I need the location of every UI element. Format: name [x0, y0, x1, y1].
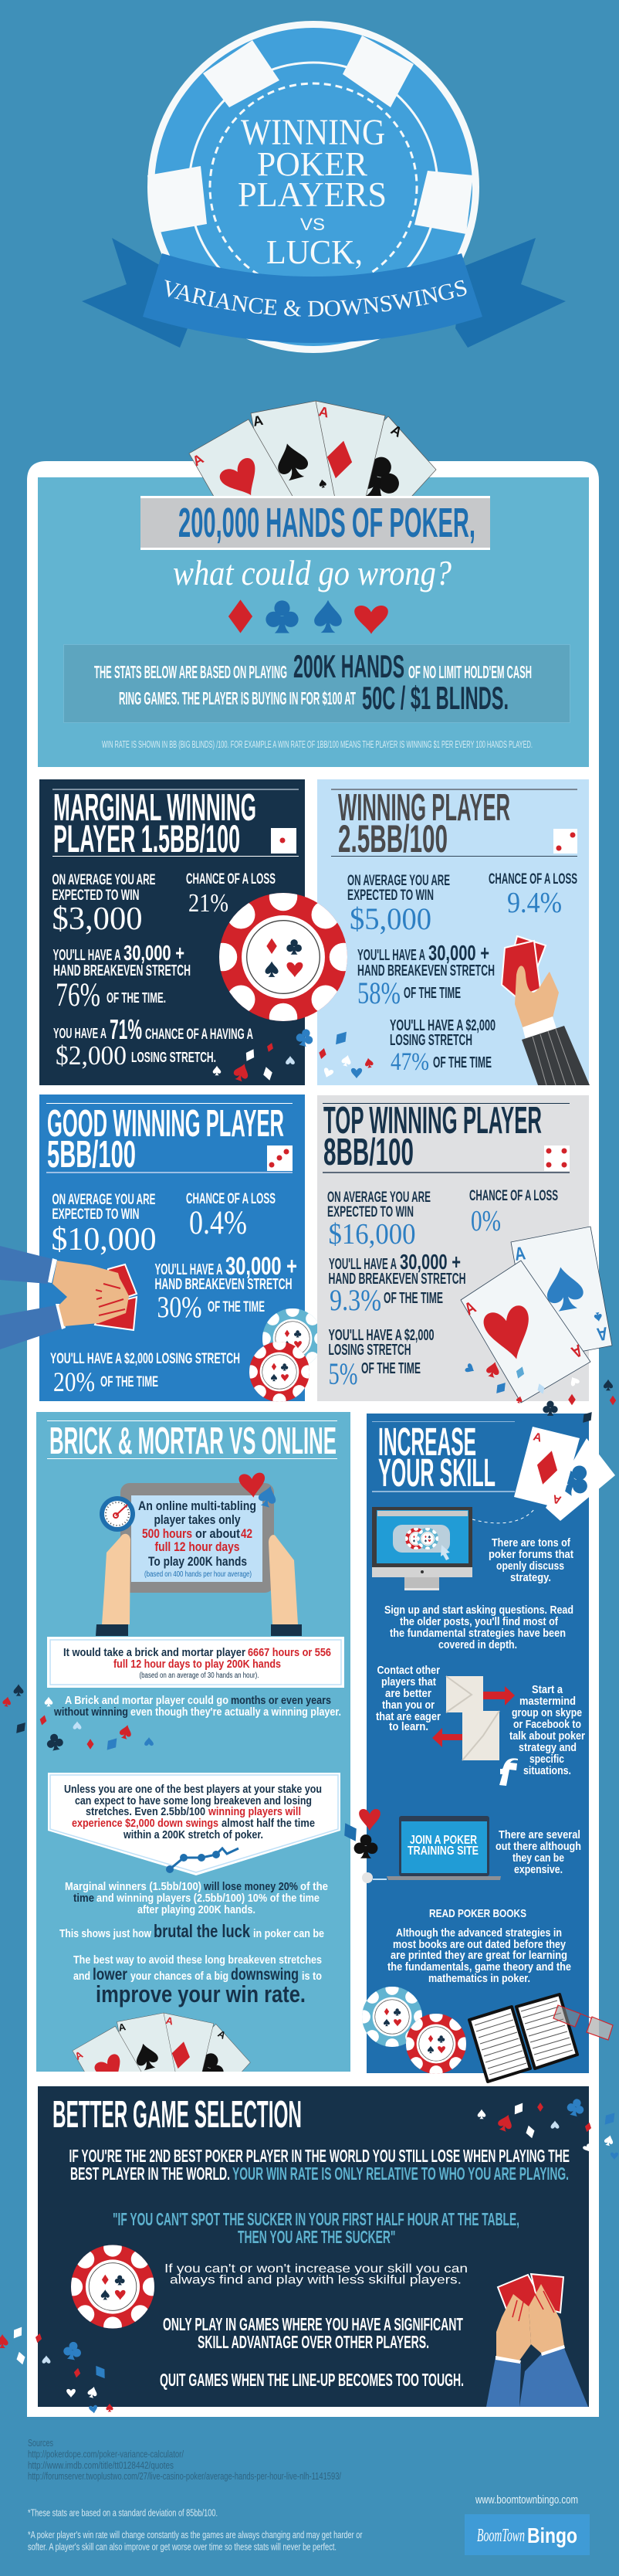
tablet text: or about [195, 1526, 240, 1541]
stats: 30% [157, 1291, 202, 1324]
stats: $2,000 [56, 1040, 127, 1071]
text: forums: strategy. [510, 1571, 551, 1584]
text: second best player [69, 2146, 570, 2184]
confetti suits [465, 1360, 616, 1405]
stats: 30,000 + [225, 1252, 297, 1280]
text: poker books: READ POKER BOOKS [429, 1907, 526, 1920]
playing cards illustration: A [462, 1298, 479, 1319]
card fan illustration: A [190, 451, 206, 469]
stats: YOU'LL HAVE A [329, 1256, 397, 1273]
text: marginal winners: after playing 200K hands. [137, 1903, 255, 1916]
stats: CHANCE OF A LOSS [469, 1188, 558, 1204]
stats: 5% [329, 1356, 358, 1391]
text: training sites: they can be [512, 1851, 564, 1865]
callout: brick and mortar hours [47, 1637, 344, 1688]
headline banner [140, 496, 490, 550]
tablet text: 500 hours [142, 1526, 192, 1541]
confetti suits [0, 2109, 618, 2414]
stats: 30,000 + [400, 1250, 461, 1274]
stats: HAND BREAKEVEN STRETCH [53, 962, 191, 979]
stats: OF THE TIME [404, 985, 461, 1002]
icon: laptop: JOIN A POKER [410, 1834, 477, 1847]
stats: YOU'LL HAVE A [357, 947, 425, 964]
heading: PLAYER 1.5BB/100 [53, 817, 240, 860]
text: brutal luck: This shows just how [59, 1927, 151, 1940]
heading: GOOD WINNING PLAYER [47, 1103, 284, 1145]
panel: marginal winning player [39, 779, 305, 1085]
footnotes: *A poker player's win rate will change constantly as the games are always changing and may get harder or [28, 2529, 363, 2540]
logo: boomtown bingo: BoomTown [477, 2526, 525, 2546]
callout: downswings: can expect to have some long breakeven and losing [75, 1794, 312, 1807]
stats: 9.4% [507, 887, 562, 919]
tablet text [138, 1498, 256, 1579]
stats: 21% [188, 889, 228, 918]
icon: facebook [499, 1758, 518, 1786]
stats: OF THE TIME [208, 1299, 265, 1315]
icon: monitor [372, 1507, 472, 1590]
playing cards illustration: A [595, 1323, 609, 1346]
heading [53, 787, 256, 860]
text: skill advantage [163, 2314, 463, 2352]
text: sign up: covered in depth. [438, 1638, 517, 1651]
text: improve your win rate: and [73, 1970, 90, 1983]
text: second best player: BEST PLAYER IN THE WORLD. [70, 2164, 230, 2184]
stats: YOU HAVE A [53, 1026, 107, 1041]
hands holding cards illustration [486, 2274, 588, 2407]
poker chips stack [357, 1982, 471, 2079]
card fan illustration: A [73, 2048, 85, 2062]
icon: die four [544, 1145, 570, 1171]
text: sign up: the fundamental strategies have been [390, 1627, 566, 1640]
playing cards illustration: A [551, 1492, 563, 1507]
stats [52, 871, 276, 1071]
tablet text: (based on 400 hands per hour average) [144, 1570, 252, 1579]
stats: ON AVERAGE YOU ARE [52, 872, 156, 888]
stats: HAND BREAKEVEN STRETCH [329, 1271, 466, 1288]
text: mastermind group: group on skype [512, 1706, 582, 1719]
stats: YOU'LL HAVE A $2,000 LOSING STRETCH [50, 1351, 240, 1367]
confetti suits [478, 2097, 586, 2140]
text: contact players: than you or [382, 1699, 435, 1712]
suit icons row [228, 599, 388, 634]
heading [378, 1420, 496, 1495]
poker chips stack [245, 1304, 327, 1407]
panel: better game selection: BETTER GAME SELECTION [52, 2094, 302, 2136]
text: months without winning: A Brick and mortar player could go [65, 1694, 228, 1707]
text: forums: There are tons of [492, 1536, 571, 1549]
tablet text: An online multi-tabling [138, 1498, 256, 1513]
heading: BRICK & MORTAR VS ONLINE [49, 1420, 337, 1462]
stats description box: 200K HANDS [293, 648, 404, 684]
text: marginal winners: time [73, 1892, 94, 1905]
logo: boomtown bingo: Bingo [527, 2523, 577, 2547]
text: contact players: players that [381, 1675, 436, 1688]
playing cards illustration [461, 1227, 612, 1403]
text: training sites: out there although [496, 1840, 581, 1853]
subtitle on ribbon: VARIANCE & DOWNSWINGS [164, 280, 466, 317]
card fan illustration: A [388, 422, 404, 440]
heading [47, 1103, 284, 1176]
sources: http://forumserver.twoplustwo.com/27/live-casino-poker/average-hands-per-hour-live-nlh-1141593/ [28, 2470, 341, 2482]
playing cards illustration: A [513, 1242, 527, 1264]
stats [327, 1188, 558, 1391]
stats: CHANCE OF A LOSS [186, 871, 276, 888]
text: marginal winners: will lose money 20% [203, 1880, 298, 1893]
stats: ON AVERAGE YOU ARE [327, 1190, 431, 1206]
callout: brick and mortar hours: (based on an average of 30 hands an hour). [139, 1672, 259, 1680]
stats: $3,000 [52, 901, 142, 937]
tablet text: player takes only [154, 1512, 241, 1527]
heading [323, 1100, 542, 1173]
text: marginal winners: Marginal winners (1.5bb/100) [65, 1880, 201, 1893]
stats: EXPECTED TO WIN [327, 1204, 414, 1220]
title text: VS [300, 215, 325, 234]
title text: POKER [257, 145, 368, 183]
sources [28, 2437, 341, 2482]
text: poker books: Although the advanced strategies in [396, 1926, 562, 1940]
stats: YOU'LL HAVE A [154, 1261, 222, 1278]
card fan illustration: A [317, 403, 330, 421]
card fan illustration: A [117, 2021, 127, 2034]
text: less skilful players [164, 2262, 468, 2286]
text: contact players: are better [385, 1687, 431, 1700]
text: less skilful players: If you can't or won't increase your skill you can [164, 2262, 468, 2276]
stats: ON AVERAGE YOU ARE [52, 1192, 156, 1208]
poker chip: red centre [209, 883, 357, 1031]
quote: THEN YOU ARE THE SUCKER" [238, 2227, 395, 2247]
stats: YOU'LL HAVE A [52, 947, 120, 964]
text: contact players [376, 1664, 441, 1733]
line chart icon [166, 1848, 238, 1873]
white content sheet [27, 461, 599, 2417]
icon: die one [271, 828, 296, 854]
text: sign up [384, 1604, 573, 1651]
panel: brick and mortar vs online [36, 1412, 350, 2111]
stats [347, 871, 577, 1076]
stats description box: THE STATS BELOW ARE BASED ON PLAYING [94, 662, 287, 682]
text: training sites: There are several [499, 1828, 580, 1841]
stats: OF THE TIME [100, 1374, 158, 1390]
text: mastermind group: talk about poker [509, 1729, 585, 1743]
text: improve your win rate [73, 1953, 322, 2008]
sources: Sources [28, 2437, 53, 2449]
stats: EXPECTED TO WIN [347, 888, 434, 904]
title text: LUCK, [266, 233, 363, 271]
side confetti suits [2, 1401, 595, 1858]
card fan illustration [188, 400, 437, 496]
hands shuffling cards illustration [0, 1246, 137, 1349]
tablet text: To play 200K hands [148, 1554, 247, 1569]
card fan illustration: A [165, 2014, 174, 2028]
title text: WINNING [241, 112, 385, 153]
stats: ON AVERAGE YOU ARE [347, 873, 450, 889]
footnotes: *These stats are based on a standard deviation of 85bb/100. [28, 2507, 218, 2518]
poker chip title badge [147, 21, 479, 353]
text: mastermind group: situations. [523, 1764, 571, 1777]
playing cards illustration: A [568, 1340, 585, 1361]
text: mastermind group [509, 1683, 585, 1777]
stats: 47% [391, 1048, 429, 1076]
text: mastermind group: or Facebook to [513, 1718, 581, 1731]
callout: downswings: almost half the time [222, 1817, 315, 1830]
stats description box: RING GAMES. THE PLAYER IS BUYING IN FOR $100 AT [119, 688, 356, 708]
intro panel [38, 401, 589, 767]
callout: downswings [48, 1773, 340, 1875]
text: mastermind group: strategy and [519, 1741, 577, 1754]
stats: 76% [56, 977, 100, 1013]
text: poker books: mathematics in poker. [428, 1972, 530, 1985]
heading [338, 787, 510, 860]
website url: www.boomtownbingo.com [475, 2493, 578, 2506]
stats: YOU'LL HAVE A $2,000 [329, 1327, 434, 1344]
icon: laptop [387, 1816, 501, 1880]
text: months without winning: even though they're actually a winning player. [130, 1705, 341, 1719]
callout: downswings: Unless you are one of the best players at your stake you [64, 1783, 322, 1796]
panel: winning player [0, 779, 618, 2555]
stats: EXPECTED TO WIN [52, 888, 139, 904]
playing cards illustration: A [532, 1430, 543, 1445]
text: mastermind group: mastermind [519, 1695, 576, 1708]
footnotes [28, 2507, 363, 2552]
script subheading: what could go wrong? [173, 553, 452, 592]
stats: 30,000 + [428, 941, 489, 965]
text: forums: poker forums that [489, 1548, 573, 1561]
icon: die three [267, 1145, 293, 1171]
text: brutal luck: in poker can be [253, 1927, 324, 1940]
icon: stopwatch [100, 1496, 135, 1532]
quote [113, 2209, 519, 2247]
text: training sites: expensive. [514, 1863, 563, 1876]
stats: 0.4% [189, 1205, 247, 1241]
heading: 2.5BB/100 [338, 817, 448, 860]
card fan illustration: A [252, 412, 265, 429]
title text [238, 112, 387, 271]
icon: heart and spade [238, 1472, 279, 1509]
stats: 30,000 + [123, 941, 184, 965]
panel: good winning player [0, 1095, 327, 1407]
sources: http://www.imdb.com/title/tt0128442/quotes [28, 2459, 174, 2471]
title text: PLAYERS [238, 175, 387, 214]
text: brutal luck [59, 1921, 324, 1941]
text: poker books: are printed they are great for learning [391, 1949, 567, 1962]
stats: EXPECTED TO WIN [52, 1207, 139, 1223]
ribbon banner [82, 238, 566, 348]
text: months without winning: without winning [53, 1705, 128, 1719]
icon: die two [553, 829, 577, 854]
text: improve your win rate: lower [93, 1966, 127, 1984]
poker chip [64, 2238, 161, 2335]
stats: 71% [110, 1013, 142, 1045]
panel: better game selection [38, 2086, 589, 2407]
text: poker books: the fundamentals, game theory and the [387, 1960, 571, 1974]
stats [50, 1191, 297, 1397]
text: marginal winners: of the [300, 1880, 328, 1893]
stats: OF THE TIME. [107, 990, 166, 1006]
callout: downswings: stretches. Even 2.5bb/100 [86, 1805, 205, 1818]
stats: LOSING STRETCH [329, 1342, 411, 1359]
callout: downswings: experience $2,000 down swings [72, 1817, 218, 1830]
stats description box: 50C / $1 BLINDS. [362, 680, 509, 716]
text: poker books: most books are out dated before they [393, 1938, 567, 1951]
text: mastermind group: specific [529, 1753, 564, 1766]
stats: 0% [471, 1205, 501, 1237]
panel: increase your skill [367, 1414, 615, 2073]
stats: YOU'LL HAVE A $2,000 [390, 1017, 496, 1034]
hand holding cards illustration [502, 936, 590, 1085]
heading: MARGINAL WINNING [53, 787, 256, 829]
tablet text: full 12 hour days [154, 1539, 239, 1554]
text: improve your win rate: downswing [231, 1966, 299, 1984]
text: contact players: Contact other [377, 1664, 440, 1677]
stats: CHANCE OF A HAVING A [145, 1027, 253, 1043]
heading: 8BB/100 [323, 1132, 414, 1173]
icon: laptop: TRAINING SITE [408, 1845, 479, 1858]
confetti suits [213, 1027, 374, 1083]
text: marginal winners [65, 1880, 328, 1916]
text: mastermind group: Start a [532, 1683, 563, 1696]
text: improve your win rate: The best way to avoid these long breakeven stretches [73, 1953, 322, 1967]
card fan illustration [73, 2013, 251, 2072]
playing cards illustration [514, 1427, 615, 1521]
text: improve your win rate: is to [302, 1970, 322, 1983]
stats: OF THE TIME [361, 1360, 421, 1377]
text: forums [489, 1536, 573, 1584]
stats: 58% [357, 976, 401, 1010]
dashed connector [472, 1509, 535, 1523]
text: months without winning: months or even years [231, 1694, 331, 1707]
text: contact players: that are eager [376, 1710, 441, 1723]
stats: $5,000 [350, 901, 431, 936]
text: brutal luck: brutal the luck [154, 1921, 250, 1941]
callout: brick and mortar hours: It would take a brick and mortar player [63, 1646, 245, 1659]
text: sign up: Sign up and start asking questions. Read [384, 1604, 573, 1617]
callout: brick and mortar hours: 6667 hours or 556 [248, 1646, 331, 1659]
logo: boomtown bingo [465, 2514, 590, 2555]
stats: $10,000 [51, 1222, 156, 1257]
sources: http://pokerdope.com/poker-variance-calculator/ [28, 2449, 184, 2459]
text: improve your win rate: improve your win rate. [96, 1980, 306, 2008]
stats description box [63, 644, 570, 723]
connector dot [362, 1872, 387, 1883]
callout: downswings: winning players will [208, 1805, 301, 1818]
stats: 9.3% [330, 1284, 381, 1317]
panel: increase your skill: YOUR SKILL [378, 1451, 496, 1495]
card fan illustration: A [216, 2028, 228, 2041]
heading: 5BB/100 [47, 1134, 136, 1176]
footnotes: softer. A player's skill can also improve or get worse over time so these stats will never be perfect. [28, 2541, 337, 2552]
tablet text: 42 [241, 1526, 252, 1541]
hands holding tablet [96, 1534, 302, 1636]
stats: HAND BREAKEVEN STRETCH [154, 1276, 292, 1293]
text: sign up: the older posts, you'll find most of [400, 1615, 559, 1628]
text: contact players: to learn. [389, 1720, 428, 1733]
icon: open book with glasses [469, 1994, 613, 2082]
text: less skilful players: always find and play with less skilful players. [170, 2274, 462, 2286]
stats: $16,000 [329, 1218, 415, 1251]
text: forums: openly discuss [496, 1560, 564, 1573]
heading: INCREASE [378, 1420, 476, 1464]
stats: OF THE TIME [433, 1054, 492, 1071]
text: months without winning [53, 1694, 341, 1719]
panel: top winning player [317, 1095, 612, 1403]
callout: downswings: within a 200K stretch of poker. [123, 1828, 263, 1841]
stats: CHANCE OF A LOSS [186, 1191, 276, 1207]
text: skill advantage: SKILL ADVANTAGE OVER OTHER PLAYERS. [198, 2332, 429, 2352]
stats: 20% [53, 1366, 95, 1397]
stats: LOSING STRETCH [390, 1032, 472, 1049]
text: improve your win rate: your chances of a big [130, 1970, 228, 1983]
callout: brick and mortar hours: full 12 hour days to play 200K hands [113, 1658, 281, 1671]
text: marginal winners: and winning players (2.5bb/100) 10% of the time [96, 1892, 320, 1905]
text: training sites [496, 1828, 581, 1876]
icon: envelopes and arrows [432, 1676, 515, 1760]
tablet illustration [96, 1472, 302, 1636]
text: poker books [387, 1907, 571, 1985]
stats: HAND BREAKEVEN STRETCH [357, 962, 495, 979]
stats: LOSING STRETCH. [131, 1050, 216, 1065]
stats: OF THE TIME [384, 1290, 443, 1307]
